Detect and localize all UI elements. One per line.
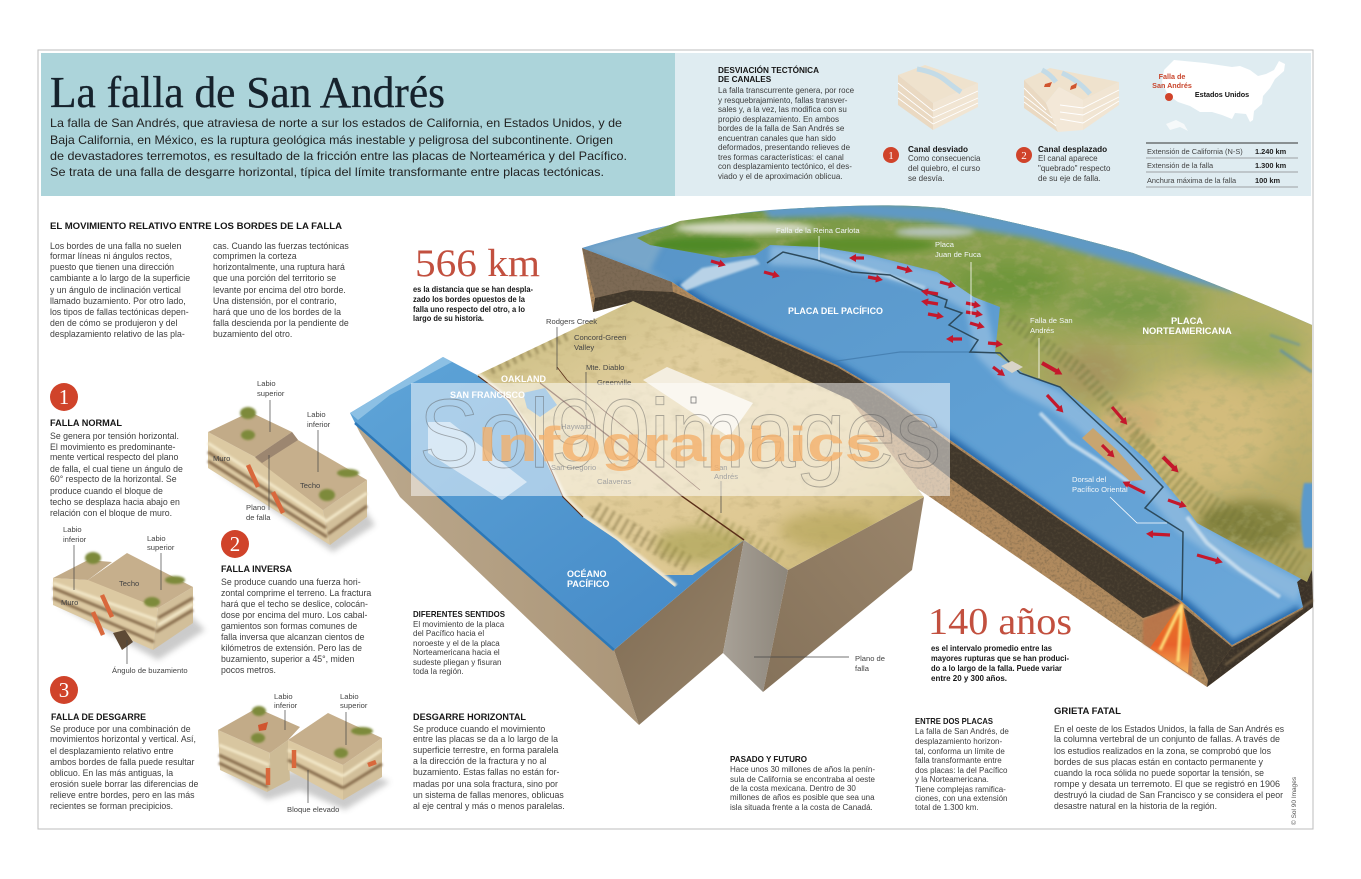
step 3: falla de desgarre: Se produce por una combinación de — [50, 724, 191, 734]
text: entre dos placas: falla transformante entre — [915, 756, 1002, 765]
label: Mte. Diablo: Mte. Diablo — [586, 363, 624, 372]
text: pasado y futuro: PASADO Y FUTURO — [730, 755, 808, 764]
top surface edge highlight — [355, 423, 614, 650]
label: Placa Juan de Fuca — [935, 240, 982, 315]
plate motion arrows — [711, 258, 1218, 561]
text: diferentes sentidos: del Pacífico hacia el — [413, 629, 484, 638]
callout 1: canal desviado: 1 — [888, 150, 894, 162]
Alaska and northern coast band — [650, 237, 760, 253]
labels: superior — [340, 701, 368, 710]
labels: de falla — [246, 513, 271, 522]
text: desgarre horizontal: entre las placas se da a lo largo de la — [413, 734, 558, 744]
step 2: falla inversa: gamientos son formas comunes de — [221, 621, 357, 631]
section: relative movement heading and text: cambiante a lo largo de la superficie — [50, 273, 190, 283]
labels: Techo — [300, 481, 320, 490]
labels: superior — [147, 543, 175, 552]
locator map of United States — [1152, 60, 1285, 131]
label: Plano de falla: falla — [855, 664, 870, 673]
text: desgarre horizontal: buzamiento. Estas fallas no están for- — [413, 767, 559, 777]
slab side wall — [580, 240, 1315, 690]
step 1: falla normal: 60° respecto de la horizontal. Se — [50, 474, 177, 484]
section: relative movement heading and text: desplazamiento relativo de las pla- — [50, 329, 185, 339]
labels — [213, 379, 331, 522]
canal deviation text: y resquebrajamiento, fallas transver- — [718, 96, 848, 105]
label: Concord-Green Valley: Valley — [574, 343, 594, 352]
stat: 566 km: 566 km — [415, 242, 540, 285]
text: desgarre horizontal: un sistema de fallas menores, oblicuas — [413, 790, 564, 800]
step 1: falla normal — [50, 383, 183, 518]
text: grieta fatal: rompe y desata un terremoto. El que se registró en 1906 — [1054, 779, 1280, 789]
label: Placa Juan de Fuca: Juan de Fuca — [935, 250, 982, 259]
section: relative movement heading and text: horizontalmente, una ruptura hará — [213, 262, 345, 272]
section: relative movement heading and text: EL MOVIMIENTO RELATIVO ENTRE LOS BORDES DE LA FALLA — [50, 220, 342, 231]
labels: Muro — [213, 454, 230, 463]
step 1: falla normal: Se genera por tensión horizontal. — [50, 431, 179, 441]
text: desgarre horizontal: Se produce cuando el movimiento — [413, 724, 545, 734]
text: grieta fatal — [1054, 706, 1285, 811]
text: diferentes sentidos: Norteamericana hacia el — [413, 648, 500, 657]
step 2: falla inversa: Se produce cuando una fuerza hori- — [221, 577, 361, 587]
step 1: falla normal: mente vertical respecto del plano — [50, 452, 179, 462]
text: pasado y futuro: Hace unos 30 millones de años la penín- — [730, 765, 875, 774]
label: Calaveras: Calaveras — [597, 477, 631, 486]
label: San Gregorio: San Gregorio — [551, 463, 596, 472]
section: relative movement heading and text: falla descienda por la pendiente de — [213, 318, 349, 328]
callout 2: canal desplazado: El canal aparece — [1038, 154, 1098, 163]
step 3: falla de desgarre: oblicuo. En las más antiguas, la — [50, 768, 173, 778]
lava at ridge — [1143, 602, 1192, 676]
right wall — [763, 497, 924, 692]
section: relative movement heading and text — [50, 220, 349, 339]
step 1: falla normal: techo se desplaza hacia abajo en — [50, 497, 180, 507]
step 3: falla de desgarre — [50, 676, 198, 811]
label: San Francisco: SAN FRANCISCO — [450, 390, 525, 400]
San Francisco area marker — [1001, 361, 1023, 373]
callout 1: canal desviado: del quiebro, el curso — [908, 164, 981, 173]
watermark: Sol90images — [419, 379, 941, 488]
data table: 1.240 km — [1255, 147, 1287, 156]
label: Falla de San Andrés: Andrés — [1030, 326, 1054, 335]
credit: © Sol 90 Images — [1290, 776, 1298, 825]
label: San Andrés on block: San — [714, 463, 728, 472]
intro text: La falla de San Andrés, que atraviesa de norte a sur los estados de California, en Estados Unidos, y de — [50, 116, 622, 130]
label: Falla de la Reina Carlota: Falla de la Reina Carlota — [776, 226, 860, 235]
label: Concord-Green Valley: Concord-Green — [574, 333, 626, 342]
label: San Andrés on block: Andrés — [714, 472, 738, 481]
ocean surface — [580, 205, 1315, 653]
stat: 140 años — [928, 601, 1072, 683]
section: relative movement heading and text: comprimen la corteza — [213, 251, 297, 261]
section: relative movement heading and text: que una porción del territorio se — [213, 273, 336, 283]
labels: Labio — [257, 379, 276, 388]
left wall — [355, 423, 639, 725]
front edge darkening — [672, 290, 1303, 653]
callout 2: canal desplazado: Canal desplazado — [1038, 145, 1107, 154]
section: relative movement heading and text: cas. Cuando las fuerzas tectónicas — [213, 241, 349, 251]
canal deviation text: encuentran canales que han sido — [718, 134, 836, 143]
stat: 566 km: es la distancia que se han despla- — [413, 285, 533, 294]
text: diferentes sentidos: noroeste y el de la placa — [413, 639, 500, 648]
stat: 566 km: largo de su historia. — [413, 314, 484, 323]
text: desgarre horizontal: al eje central y más o menos paralelas. — [413, 801, 565, 811]
label: Concord-Green Valley — [574, 333, 626, 352]
step 2: falla inversa: buzamiento, superior a 45°, miden — [221, 654, 354, 664]
text: diferentes sentidos: DIFERENTES SENTIDOS — [413, 610, 506, 619]
canal deviation text: viado y el de aproximación oblicua. — [718, 172, 843, 181]
text: pasado y futuro: isla situada frente a la costa de Canadá. — [730, 803, 873, 812]
top land surface — [470, 295, 930, 587]
callout 1: canal desviado — [883, 145, 981, 183]
top ocean surface — [350, 357, 744, 650]
step 3: falla de desgarre: movimientos horizontal y vertical. Así, — [50, 734, 196, 744]
section: relative movement heading and text: puesto que tienen una dirección — [50, 262, 174, 272]
label: Oakland: OAKLAND — [501, 374, 546, 384]
diagram: displaced channel block — [1024, 68, 1119, 132]
label: Océano Pacífico: OCÉANO — [567, 569, 607, 579]
intro text: de devastadores terremotos, es resultado de la fricción entre las placas de Norteamérica y del Pacífico. — [50, 149, 627, 163]
label: Placa del Pacífico: PLACA DEL PACÍFICO — [788, 306, 883, 316]
labels: Labio — [340, 692, 359, 701]
callout 2: canal desplazado: de su eje de falla. — [1038, 174, 1101, 183]
labels: inferior — [274, 701, 298, 710]
step 2: falla inversa: FALLA INVERSA — [221, 563, 292, 574]
label: Rodgers Creek — [546, 317, 597, 370]
stat: 140 años: do a lo largo de la falla. Puede variar — [931, 664, 1062, 673]
text: grieta fatal: bordes de sus placas están en contacto permanente y — [1054, 757, 1264, 767]
text: pasado y futuro: sula de California se encontraba al oeste — [730, 775, 876, 784]
step 2: falla inversa: pocos metros. — [221, 665, 276, 675]
step 2: falla inversa: dose por encima del muro. Los cabal- — [221, 610, 367, 620]
labels: Techo — [119, 579, 139, 588]
label: Dorsal del Pacífico Oriental — [1072, 475, 1167, 523]
stat: 140 años: 140 años — [928, 601, 1072, 643]
top ocean light bevel — [350, 357, 452, 420]
section: relative movement heading and text: los tipos de fallas tectónicas depen- — [50, 307, 189, 317]
data table: 100 km — [1255, 176, 1280, 185]
text: entre dos placas: total de 1.300 km. — [915, 803, 979, 812]
label: Océano Pacífico: PACÍFICO — [567, 579, 609, 589]
labels: inferior — [63, 535, 87, 544]
labels — [61, 525, 188, 675]
label: Dorsal del Pacífico Oriental: Dorsal del — [1072, 475, 1106, 484]
text: entre dos placas: tal, conforma un límite de — [915, 747, 1005, 756]
label: Falla de San Andrés: Falla de San — [1030, 316, 1073, 325]
stat: 140 años: mayores rupturas que se han produci- — [931, 654, 1069, 663]
text: desgarre horizontal: madas por una sola fractura, sino por — [413, 779, 558, 789]
step 3: falla de desgarre: FALLA DE DESGARRE — [51, 711, 146, 722]
stat: 566 km: falla uno respecto del otro, a lo — [413, 305, 525, 314]
callout 2: canal desplazado — [1016, 145, 1111, 183]
labels — [274, 692, 368, 814]
text: desgarre horizontal: DESGARRE HORIZONTAL — [413, 711, 526, 722]
label: Hayward: Hayward — [561, 422, 591, 431]
label: San Andrés on block — [714, 463, 738, 513]
diagram: reverse fault block — [208, 379, 375, 552]
stat: 566 km: zado los bordes opuestos de la — [413, 295, 526, 304]
label: Océano Pacífico — [567, 569, 609, 589]
front wall — [614, 540, 744, 725]
canal deviation text — [718, 64, 855, 181]
step 2: falla inversa: hará que el techo se deslice, colocán- — [221, 599, 368, 609]
step 1: falla normal: 1 — [59, 385, 69, 409]
central fault block illustration — [350, 295, 930, 725]
canal deviation text: bordes de la falla de San Andrés se — [718, 124, 845, 133]
canal deviation text: DE CANALES — [718, 75, 772, 84]
label: Plano de falla: Plano de — [855, 654, 885, 663]
section: relative movement heading and text: buzamiento del otro. — [213, 329, 292, 339]
step 1: falla normal: relación con el bloque de muro. — [50, 508, 172, 518]
section: relative movement heading and text: hará que uno de los bordes de la — [213, 307, 341, 317]
step 1: falla normal: de falla, el cual tiene un ángulo de — [50, 464, 183, 474]
step 3: falla de desgarre: erosión suele borrar las diferencias de — [50, 779, 198, 789]
intro text: Baja California, en México, es la ruptura geológica más inestable y peligrosa del subcontinente. Origen — [50, 133, 613, 147]
title: La falla de San Andrés — [50, 68, 445, 117]
canal deviation text: tres formas características: el canal — [718, 153, 844, 162]
step 1: falla normal: produce cuando el bloque de — [50, 486, 163, 496]
text: diferentes sentidos: sudeste pliegan y fisuran — [413, 658, 502, 667]
text: grieta fatal: cuando la roca sólida no puede soportar la tensión, se — [1054, 768, 1264, 778]
white shelf bands — [1040, 413, 1280, 597]
intro text — [50, 116, 627, 179]
labels: Ángulo de buzamiento — [112, 666, 188, 675]
canal deviation text: La falla transcurrente genera, por roce — [718, 86, 855, 95]
submarine cliff near Alaska — [680, 258, 760, 291]
text: entre dos placas — [915, 717, 1009, 812]
text: entre dos placas: Tiene complejas ramifica- — [915, 785, 1006, 794]
step 3: falla de desgarre: ambos bordes de falla puede resultar — [50, 757, 195, 767]
step 1: falla normal: FALLA NORMAL — [50, 417, 122, 428]
text: entre dos placas: ciones, con una extensión — [915, 794, 1008, 803]
coastal shelf — [770, 255, 1300, 592]
callout 1: canal desviado: Canal desviado — [908, 145, 968, 154]
main fault lines — [478, 367, 744, 540]
text: grieta fatal: En el oeste de los Estados Unidos, la falla de San Andrés es — [1054, 724, 1285, 734]
text: pasado y futuro: de la costa mexicana. Dentro de 30 — [730, 784, 856, 793]
text: grieta fatal: destruyó la ciudad de San Francisco y se considera el peor — [1054, 790, 1283, 800]
header panel: canal deviation — [675, 53, 1311, 196]
section: relative movement heading and text: y un ángulo de inclinación vertical — [50, 285, 181, 295]
canal deviation text: DESVIACIÓN TECTÓNICA — [718, 64, 819, 75]
canal deviation text: con desplazamiento tectónico, el des- — [718, 162, 852, 171]
text: entre dos placas: dos placas: la del Pacífico — [915, 766, 1008, 775]
section: relative movement heading and text: Los bordes de una falla no suelen — [50, 241, 181, 251]
section: relative movement heading and text: den de cómo se produjeron y del — [50, 318, 177, 328]
labels: Plano — [246, 503, 265, 512]
label: Placa Juan de Fuca: Placa — [935, 240, 955, 249]
diagram: deviated channel block — [898, 65, 978, 130]
text: diferentes sentidos: toda la región. — [413, 667, 464, 676]
labels: Muro — [61, 598, 78, 607]
text: entre dos placas: desplazamiento horizon- — [915, 737, 1002, 746]
text: entre dos placas: y la Norteamericana. — [915, 775, 989, 784]
shallow top-left shelf — [585, 225, 669, 276]
plate boundary ridge line — [767, 252, 1183, 600]
step 2: falla inversa: falla inversa que alcanzan cientos de — [221, 632, 365, 642]
step 2: falla inversa: 2 — [230, 532, 240, 556]
labels: Labio — [307, 410, 326, 419]
step 3: falla de desgarre: el desplazamiento relativo entre — [50, 746, 174, 756]
watermark: Infographics — [478, 418, 882, 472]
bay area — [523, 388, 557, 417]
fault plane wall — [723, 540, 788, 692]
callout 1: canal desviado: se desvía. — [908, 174, 944, 183]
callout 2: canal desplazado: 2 — [1021, 150, 1027, 162]
intro text: Se trata de una falla de desgarre horizontal, típica del límite transformante entre placas tectónicas. — [50, 165, 604, 179]
label: Plano de falla — [754, 654, 885, 673]
header panel: title and intro — [41, 53, 675, 196]
North American land mass — [637, 205, 1312, 582]
canal deviation text: sales y, a la vez, las modifica con su — [718, 105, 847, 114]
step 2: falla inversa: kilómetros de extensión. Pero las de — [221, 643, 362, 653]
text: diferentes sentidos — [413, 610, 506, 676]
step 3: falla de desgarre: relieve entre bordes, pero en las más — [50, 790, 195, 800]
locator map of United States: San Andrés — [1152, 81, 1192, 90]
callout 1: canal desviado: Como consecuencia — [908, 154, 981, 163]
text: diferentes sentidos: El movimiento de la placa — [413, 620, 505, 629]
label: Greenville: Greenville — [597, 378, 631, 387]
section: relative movement heading and text: levante por encima del otro borde. — [213, 285, 346, 295]
labels: Bloque elevado — [287, 805, 339, 814]
stat: 566 km — [413, 242, 540, 323]
mountain ridges — [1130, 440, 1300, 565]
text: pasado y futuro — [730, 755, 876, 812]
label: Placa Norteamericana: PLACA — [1171, 316, 1203, 326]
labels: Labio — [274, 692, 293, 701]
labels: Labio — [63, 525, 82, 534]
text: entre dos placas: La falla de San Andrés, de — [915, 727, 1009, 736]
callout 2: canal desplazado: "quebrado" respecto — [1038, 164, 1111, 173]
stat: 140 años: entre 20 y 300 años. — [931, 674, 1007, 683]
locator map of United States: Falla de — [1159, 72, 1185, 81]
diagram: strike-slip fault blocks — [218, 692, 390, 814]
data table — [1146, 143, 1298, 187]
Baja California peninsula — [1082, 428, 1143, 481]
labels: Labio — [147, 534, 166, 543]
text: desgarre horizontal: a la dirección de la fractura y no al — [413, 756, 546, 766]
Arctic Ocean strip — [760, 202, 1233, 292]
data table: Extensión de la falla — [1147, 161, 1214, 170]
step 3: falla de desgarre: recientes se forman precipicios. — [50, 801, 173, 811]
step 1: falla normal: El movimiento es predominante- — [50, 442, 176, 452]
data table: Anchura máxima de la falla — [1147, 176, 1237, 185]
section: relative movement heading and text: Una distensión, por el contrario, — [213, 296, 337, 306]
text: grieta fatal: los estudios realizados en la zona, se comprobó que los — [1054, 746, 1272, 756]
text: desgarre horizontal — [413, 711, 565, 811]
label: Placa Norteamericana: NORTEAMERICANA — [1142, 326, 1232, 336]
step 3: falla de desgarre: 3 — [59, 678, 69, 702]
stat: 140 años: es el intervalo promedio entre las — [931, 644, 1053, 653]
labels: superior — [257, 389, 285, 398]
label: Falla de la Reina Carlota — [776, 226, 860, 260]
step 2: falla inversa: zontal comprime el terreno. La fractura — [221, 588, 371, 598]
step 2: falla inversa — [221, 530, 371, 675]
section: relative movement heading and text: formar líneas ni ángulos rectos, — [50, 251, 172, 261]
label: Dorsal del Pacífico Oriental: Pacífico Oriental — [1072, 485, 1128, 494]
canal deviation text: deformados, presentando relieves de — [718, 143, 851, 152]
data table: Extensión de California (N-S) — [1147, 147, 1243, 156]
text: entre dos placas: ENTRE DOS PLACAS — [915, 717, 994, 726]
text: grieta fatal: la columna vertebral de un conjunto de fallas. A través de — [1054, 734, 1280, 744]
main tectonic plate slab illustration — [580, 202, 1316, 690]
text: grieta fatal: desastre natural en la historia de la región. — [1054, 801, 1217, 811]
labels: inferior — [307, 420, 331, 429]
locator map of United States: Estados Unidos — [1195, 90, 1249, 99]
data table: 1.300 km — [1255, 161, 1287, 170]
section: relative movement heading and text: llamado buzamiento. Por otro lado, — [50, 296, 186, 306]
label: Falla de San Andrés — [1030, 316, 1073, 378]
text: grieta fatal: GRIETA FATAL — [1054, 706, 1121, 717]
text: desgarre horizontal: superficie terrestre, en forma paralela — [413, 745, 559, 755]
canal deviation text: propio desplazamiento. En ambos — [718, 115, 839, 124]
label: Placa Norteamericana — [1142, 316, 1232, 336]
diagram: normal fault block — [53, 525, 205, 675]
label: Mte. Diablo — [586, 363, 624, 410]
label: Rodgers Creek: Rodgers Creek — [546, 317, 597, 326]
text: pasado y futuro: millones de años es posible que sea una — [730, 793, 875, 802]
